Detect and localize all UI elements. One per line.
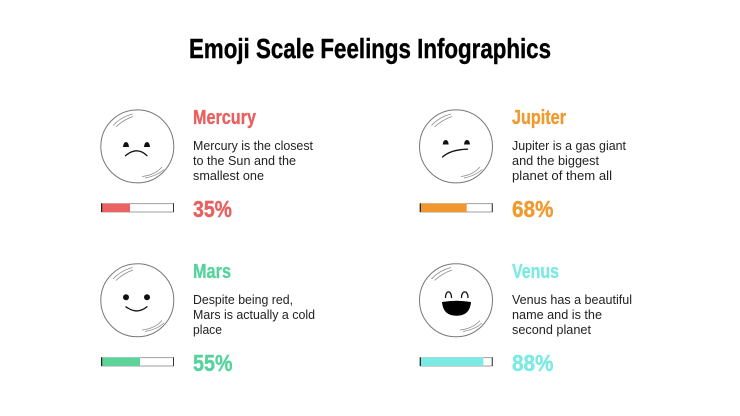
text: Venus description: [512, 292, 632, 337]
text: Mars description: Mars is actually a cold: [193, 307, 315, 322]
text: Venus description: second planet: [512, 322, 591, 337]
text: Venus description: name and is the: [512, 307, 602, 322]
panel: Jupiter: [420, 107, 626, 222]
icon: laughing emoji: [420, 264, 492, 337]
text: Mars description: place: [193, 322, 222, 337]
icon: smiling emoji: [101, 264, 174, 337]
value: 88%: 88%: [512, 350, 554, 376]
progress bar: 55%: [101, 357, 174, 366]
text: Mercury description: [193, 138, 313, 183]
icon: sad emoji: [101, 110, 174, 183]
heading: Mars: Mars: [193, 261, 231, 283]
heading: Venus: Venus: [512, 261, 559, 283]
progress bar: 68%: [420, 203, 493, 212]
text: Mercury description: Mercury is the closest: [193, 138, 313, 153]
text: Jupiter description: [512, 138, 626, 183]
progress bar: 88%: [420, 357, 493, 366]
icon: unhappy emoji: [420, 110, 492, 183]
text: Mercury description: smallest one: [193, 168, 264, 183]
title: Emoji Scale Feelings Infographics: [189, 33, 551, 64]
text: Jupiter description: planet of them all: [512, 168, 612, 183]
heading: Mercury: Mercury: [193, 107, 257, 129]
value: 55%: 55%: [193, 350, 233, 376]
text: Jupiter description: Jupiter is a gas giant: [512, 138, 626, 153]
value: 35%: 35%: [193, 196, 232, 222]
text: Mars description: Despite being red,: [193, 292, 293, 307]
text: Mars description: [193, 292, 315, 337]
progress bar: 35%: [101, 203, 174, 212]
panel: Venus: [420, 261, 632, 376]
text: Mercury description: to the Sun and the: [193, 153, 296, 168]
value: 68%: 68%: [512, 196, 554, 222]
heading: Jupiter: Jupiter: [512, 107, 566, 129]
panel: Mercury: [101, 107, 313, 222]
panel: Mars: [101, 261, 315, 376]
text: Venus description: Venus has a beautiful: [512, 292, 632, 307]
text: Jupiter description: and the biggest: [512, 153, 599, 168]
